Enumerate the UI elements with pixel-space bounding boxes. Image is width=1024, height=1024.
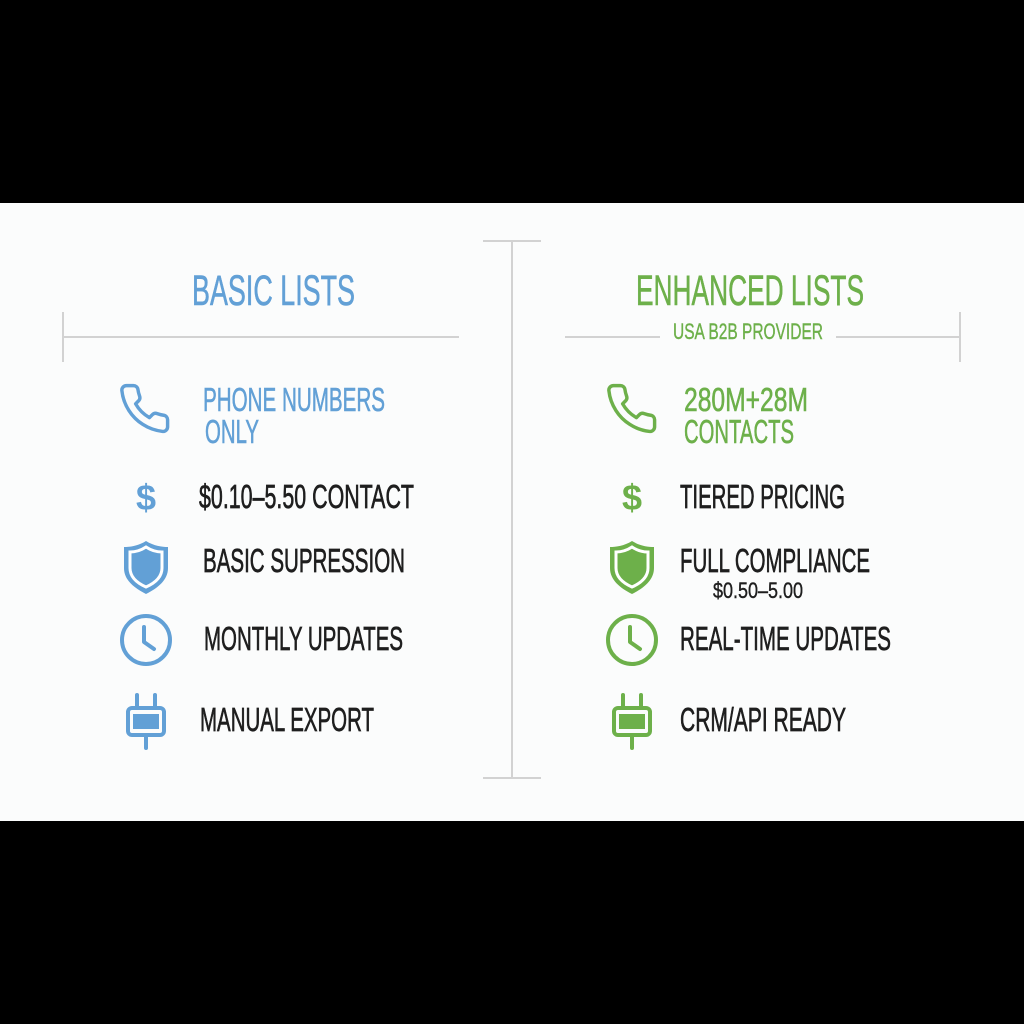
panel: basic lists (63, 267, 459, 748)
item: contacts: 280M+28M (684, 381, 808, 418)
item: compliance (680, 542, 870, 603)
icon: phone (122, 386, 168, 431)
item: updates: REAL-TIME UPDATES (680, 620, 891, 657)
item: updates: MONTHLY UPDATES (204, 620, 403, 657)
item: price: $0.10–5.50 CONTACT (199, 478, 414, 515)
heading: enhanced lists: ENHANCED LISTS (636, 267, 864, 315)
icon: plug (614, 695, 650, 748)
item: contacts (684, 381, 808, 450)
icon: dollar: $ (622, 477, 642, 518)
item: export: MANUAL EXPORT (200, 701, 374, 738)
heading: basic lists: BASIC LISTS (192, 267, 355, 315)
subheading: USA B2B PROVIDER (673, 319, 823, 344)
heading rule (565, 312, 960, 362)
background panel (0, 203, 1024, 821)
icon: shield (610, 541, 654, 594)
icon: plug (128, 695, 164, 748)
icon: phone (609, 386, 655, 431)
icon: clock (608, 616, 656, 664)
panel: enhanced lists (565, 267, 960, 748)
item: suppression: BASIC SUPRESSION (203, 542, 405, 579)
item: compliance: FULL COMPLIANCE (680, 542, 870, 579)
center divider (483, 241, 541, 778)
item: contacts: CONTACTS (684, 413, 794, 450)
icon: dollar: $ (136, 477, 156, 518)
item: phone numbers only: PHONE NUMBERS (203, 381, 385, 418)
item: phone numbers only: ONLY (205, 413, 259, 450)
item: crm: CRM/API READY (680, 701, 846, 738)
item: phone numbers only (203, 381, 385, 450)
icon: shield (124, 541, 168, 594)
item: pricing: TIERED PRICING (680, 478, 845, 515)
item: compliance: $0.50–5.00 (713, 578, 803, 603)
heading rule (63, 312, 459, 362)
icon: clock (122, 616, 170, 664)
